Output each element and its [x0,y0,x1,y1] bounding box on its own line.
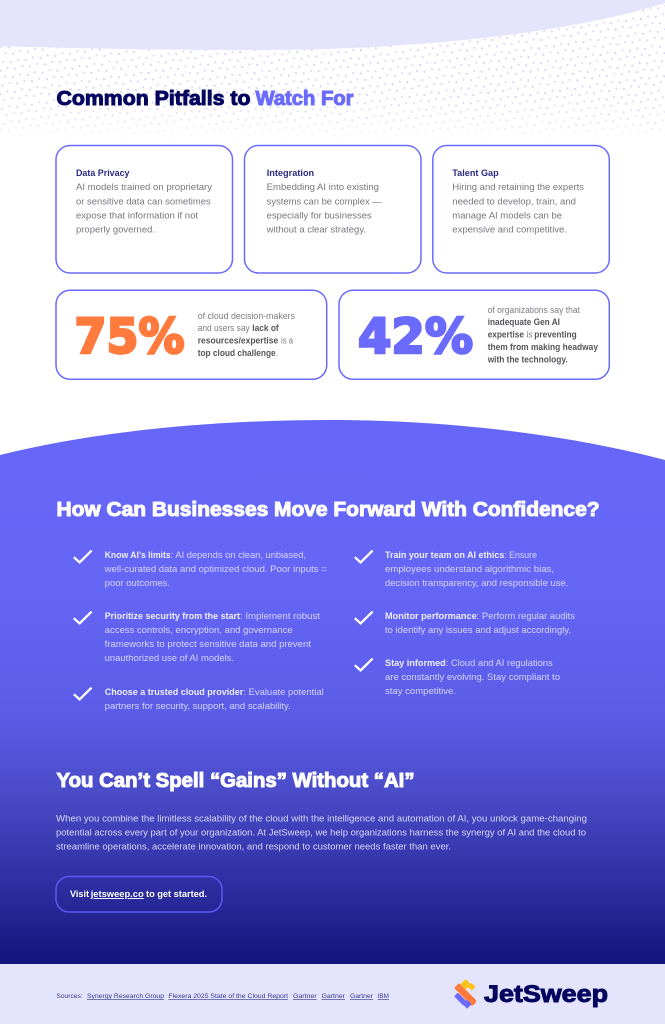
item: prioritize security: unauthorized use of AI models. [105,652,234,663]
item: monitor performance: to identify any issues and adjust accordingly. [385,624,571,635]
checklist: right column [355,549,575,696]
card body: manage AI models can be [452,209,562,220]
heading: move forward with confidence: How Can Businesses Move Forward With Confidence? [56,499,600,521]
stat description: is [526,330,533,340]
logo wordmark: JetSweep [484,981,608,1008]
footer band [0,964,665,1024]
item: prioritize security: Prioritize security from the start [105,610,240,621]
card title: Integration [267,168,314,179]
item: monitor performance: Monitor performance [385,610,477,621]
item: monitor performance: : Perform regular audits [477,610,575,621]
heading: common pitfalls: Common Pitfalls to [56,87,250,110]
logo icon [454,979,476,1009]
card body: especially for businesses [267,209,372,220]
stat description: inadequate Gen AI [488,317,560,327]
card body: systems can be complex — [267,195,382,206]
stat description: top cloud challenge [198,348,276,358]
item: know AI's limits: Know AI’s limits [105,549,171,560]
item: prioritize security: access controls, encryption, and governance [105,624,293,635]
card body: expensive and competitive. [452,224,567,234]
stat description: of organizations say that [488,305,580,315]
logo: JetSweep [454,979,608,1009]
item: train your team: Train your team on AI ethics [385,549,504,560]
card body: Hiring and retaining the experts [452,181,584,192]
card body: without a clear strategy. [266,224,366,234]
closing paragraph: When you combine the limitless scalability of the cloud with the intelligence and automation of AI, you unlock game-changing [56,812,587,823]
card title: Talent Gap [452,168,499,179]
stat description: them from making headway [488,342,598,352]
card title: Data Privacy [76,168,130,179]
item: stay informed: stay competitive. [385,685,456,696]
item: know AI's limits: poor outcomes. [105,577,170,588]
panel: talent gap [433,146,609,273]
panel: 42% stat [339,290,609,379]
card body [266,181,382,234]
item: prioritize security: : Implement robust [240,610,320,621]
item: train your team: : Ensure [504,549,537,560]
top header band [0,0,665,50]
button: visit jetsweep: jetsweep.co [90,888,144,899]
blue section background [0,420,665,964]
item: train your team: decision transparency, and responsible use. [385,577,568,588]
stat description: preventing [534,330,577,340]
sources list [56,993,389,1000]
card body [452,181,584,234]
heading: common pitfalls: Watch For [256,87,354,110]
card body: or sensitive data can sometimes [76,195,211,206]
stat description: with the technology. [487,355,568,365]
stat description: is a [281,336,293,346]
card body [76,181,212,234]
item: know AI's limits: well-curated data and optimized cloud. Poor inputs = [104,563,327,574]
heading: common pitfalls [56,87,354,110]
stat description: expertise [488,330,524,340]
panel: data privacy [56,146,232,273]
stat description: of cloud decision-makers [198,311,296,321]
sources list: Sources: [56,993,83,1000]
card body: expose that information if not [76,209,198,220]
sources list: Gartner [322,993,345,1000]
item: prioritize security: frameworks to protect sensitive data and prevent [105,638,311,649]
item: trusted cloud provider: : Evaluate potential [243,686,324,697]
closing paragraph [56,812,587,852]
card body: properly governed. [76,224,155,234]
heading: gains without AI: You Can’t Spell “Gains” Without “AI” [56,770,414,792]
stat description: resources/expertise [198,336,278,346]
card body: needed to develop, train, and [452,195,576,206]
stat description: . [276,348,278,358]
closing paragraph: streamline operations, accelerate innovation, and respond to customer needs faster than ever. [56,841,451,852]
panel: integration [244,146,421,273]
sources list: Gartner [350,993,373,1000]
stat number: 42% [358,309,473,365]
stat description: lack of [252,323,279,333]
item: trusted cloud provider: Choose a trusted cloud provider [105,686,244,697]
card body: AI models trained on proprietary [76,181,212,192]
card body: Embedding AI into existing [267,181,379,192]
item: train your team: employees understand algorithmic bias, [385,563,554,574]
item: stay informed: : Cloud and AI regulations [446,657,553,668]
closing paragraph: potential across every part of your organization. At JetSweep, we help organizations harness the synergy of AI and the cloud to [56,826,586,838]
item: trusted cloud provider [74,686,324,711]
button: visit jetsweep: Visit [70,888,89,899]
dotted background pattern [0,0,665,145]
sources list: Synergy Research Group [87,993,165,1000]
button: visit jetsweep: to get started. [146,888,207,899]
stat description [198,311,296,358]
stat description: and users say [198,323,250,333]
item: know AI's limits: : AI depends on clean, unbiased, [171,549,306,560]
button: visit jetsweep [56,876,222,912]
item: trusted cloud provider: partners for security, support, and scalability. [105,700,291,711]
sources list: Gartner [293,993,317,1000]
item: know AI's limits [74,549,327,588]
item: train your team [355,549,568,588]
item: stay informed [355,657,560,696]
item: stay informed: Stay informed [385,657,446,668]
stat description [487,305,598,365]
panel: 75% stat [56,290,327,379]
item: prioritize security [74,610,320,663]
stat number: 75% [74,309,184,365]
sources list: IBM [378,993,389,1000]
item: stay informed: are constantly evolving. Stay compliant to [385,671,560,682]
sources list: Flexera 2025 State of the Cloud Report [168,993,288,1000]
item: monitor performance [355,610,575,635]
checklist: left column [74,549,327,711]
